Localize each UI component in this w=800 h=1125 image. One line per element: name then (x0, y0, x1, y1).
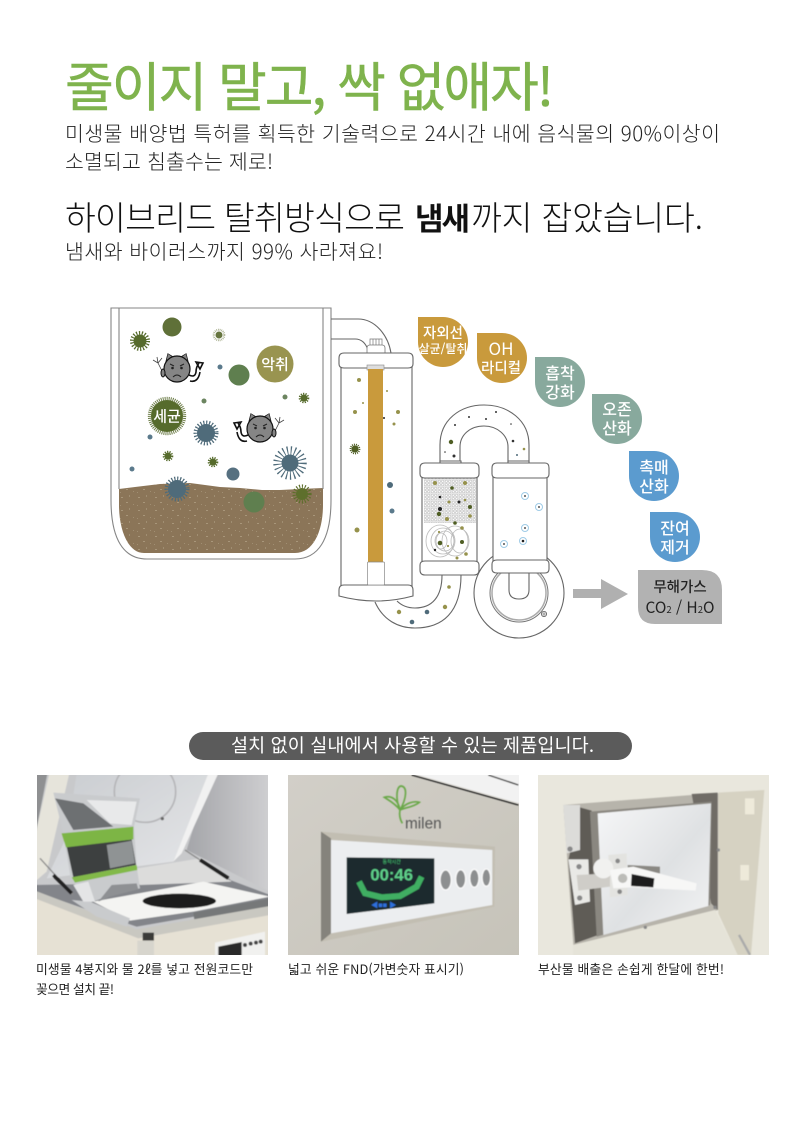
intro text: 소멸되고 침출수는 제로! (65, 145, 273, 175)
diagram: circular base (474, 548, 564, 638)
bubble: OH radical: 라디컬 (481, 357, 521, 378)
bubble: catalytic oxidation (629, 451, 679, 501)
bubble: OH radical: OH (488, 335, 514, 360)
bubble: residual removal (650, 512, 700, 562)
foil bag (53, 793, 140, 903)
title: 줄이지 말고, 싹 없애자! (65, 46, 554, 122)
bubble: adsorption (535, 357, 585, 407)
arrow (573, 579, 628, 609)
bubble: UV sterilization: 살균/탈취 (419, 340, 467, 357)
photo: open machine with microbe bag (35, 761, 270, 957)
devil character left (153, 354, 203, 382)
diagram: food waste jar (111, 308, 331, 559)
purified particles (500, 492, 542, 548)
arch particles (444, 411, 525, 458)
jar soil (119, 483, 323, 553)
result box: harmless gas: CO2 / H2O (645, 596, 715, 618)
bubble: adsorption: 강화 (545, 379, 575, 403)
filter particles (433, 481, 472, 560)
bubble: catalytic oxidation: 산화 (639, 473, 669, 497)
bubble: residual removal: 제거 (660, 534, 690, 558)
diagram: UV cylinder (339, 339, 413, 601)
devil character right (234, 414, 284, 442)
banner: 설치 없이 실내에서 사용할 수 있는 제품입니다. (231, 732, 594, 758)
label: odor (256, 346, 294, 382)
diagram: catalyst cylinder (492, 461, 549, 573)
bubble: ozone oxidation (592, 394, 642, 444)
bubble: residual removal: 잔여 (660, 515, 690, 539)
display arc (359, 877, 422, 897)
photo: FND display panel with milen logo: milen (405, 816, 442, 833)
bubble: UV sterilization (418, 317, 468, 367)
jar outline (111, 308, 331, 559)
bubble: UV sterilization: 자외선 (423, 322, 463, 343)
caption 2: 넓고 쉬운 FND(가변숫자 표시기) (288, 959, 464, 978)
caption 1: 꽂으면 설치 끝! (36, 979, 114, 998)
swirl media (426, 525, 469, 557)
subheading: 냄새 (415, 194, 470, 239)
pollutant particles (130, 318, 310, 512)
photo: FND display panel with milen logo (288, 773, 525, 955)
soil speckles (119, 483, 323, 553)
photo: FND display panel with milen logo: 동작시간 (382, 859, 401, 866)
diagram: connecting pipe from jar (331, 319, 391, 353)
photo: FND display panel with milen logo: ◀■■ ▶ (371, 900, 396, 909)
bubble: ozone oxidation: 오존 (602, 396, 632, 420)
diagram: lower U pipe (375, 575, 461, 628)
diagram: filter cylinder (420, 461, 479, 575)
subheading: 하이브리드 탈취방식으로 (65, 191, 405, 240)
result box: harmless gas (638, 570, 722, 624)
photo: FND display panel with milen logo: 00:46 (370, 866, 413, 885)
caption 1: 미생물 4봉지와 물 2ℓ를 넣고 전원코드만 (36, 959, 253, 978)
bubble: ozone oxidation: 산화 (602, 415, 632, 439)
photo: by-product discharge door (538, 775, 769, 957)
honeycomb media (424, 477, 476, 523)
caption 1 (36, 959, 253, 998)
caption 3: 부산물 배출은 손쉽게 한달에 한번! (538, 959, 724, 978)
bubble: adsorption: 흡착 (545, 360, 575, 384)
buttons (440, 869, 491, 890)
intro text (65, 117, 720, 175)
bubble: OH radical (477, 333, 527, 383)
bubble: catalytic oxidation: 촉매 (639, 454, 669, 478)
result box: harmless gas: 무해가스 (653, 576, 707, 597)
label: odor: 악취 (261, 354, 289, 374)
label: bacteria (150, 398, 184, 434)
subheading: 까지 잡았습니다. (471, 191, 703, 240)
logo (384, 786, 419, 823)
diagram: arch pipe (440, 405, 529, 462)
label: bacteria: 세균 (153, 406, 181, 426)
particles in UV cylinder (350, 378, 400, 532)
subheading (65, 191, 703, 240)
UV lamp (367, 365, 384, 370)
intro text: 미생물 배양법 특허를 획득한 기술력으로 24시간 내에 음식물의 90%이상이 (65, 117, 720, 147)
subheading note: 냄새와 바이러스까지 99% 사라져요! (65, 235, 383, 265)
pipe particles (397, 585, 451, 624)
